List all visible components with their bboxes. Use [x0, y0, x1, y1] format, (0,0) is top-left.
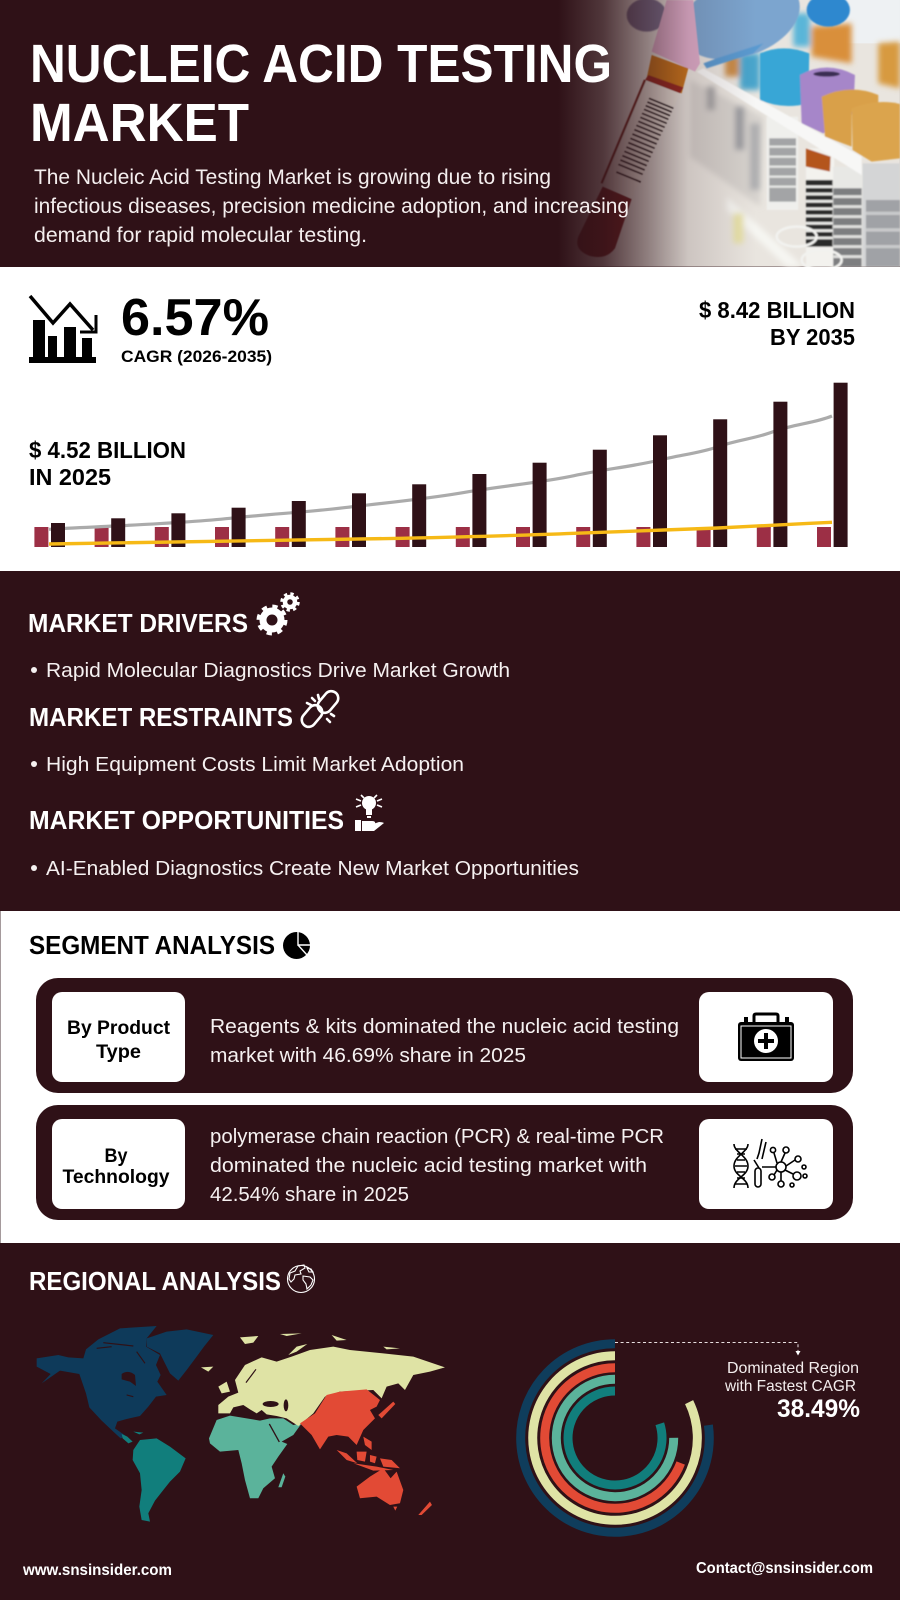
text: product type finding: market with 46.69% share in 2025: [210, 1044, 526, 1067]
label box: by product type: [52, 992, 185, 1082]
panel: header: [0, 0, 900, 270]
panel: segment analysis: [0, 911, 900, 1243]
title: NUCLEIC ACID TESTING: [30, 34, 612, 94]
text: product type finding: [210, 1015, 679, 1067]
text: technology finding: polymerase chain reaction (PCR) & real-time PCR: [210, 1125, 664, 1148]
base value: $ 4.52 BILLION: [29, 437, 186, 463]
text: driver item: Rapid Molecular Diagnostics Drive Market Growth: [46, 659, 510, 682]
label box: by technology: [52, 1119, 185, 1209]
CAGR value: 6.57%: [121, 289, 269, 347]
text: product type finding: Reagents & kits dominated the nucleic acid testing: [210, 1015, 679, 1038]
forecast value: [699, 297, 855, 350]
title: MARKET: [30, 93, 249, 153]
text: restraint item: High Equipment Costs Limit Market Adoption: [46, 753, 464, 776]
text: technology finding: 42.54% share in 2025: [210, 1183, 409, 1206]
label box: by technology: By: [104, 1145, 128, 1167]
bar chart: [34, 383, 848, 547]
base value: [29, 437, 186, 490]
callout: dominated region: with Fastest CAGR: [724, 1378, 856, 1395]
photo: lab test tubes in a rack: [568, 0, 900, 267]
region: south america: [122, 1432, 186, 1522]
text: technology finding: dominated the nucleic acid testing market with: [210, 1154, 647, 1177]
intro text: infectious diseases, precision medicine adoption, and increasing: [34, 195, 629, 218]
icon box: first aid kit: [699, 992, 833, 1082]
arrow: dashed leader to callout: [615, 1342, 800, 1356]
intro text: demand for rapid molecular testing.: [34, 224, 367, 247]
heading: regional analysis: REGIONAL ANALYSIS: [29, 1266, 281, 1296]
test tube in hand: [577, 0, 700, 257]
forecast value: $ 8.42 BILLION: [699, 297, 855, 323]
world map: [37, 1326, 445, 1522]
icon: light bulb over hand: [355, 795, 384, 831]
heading: segment analysis: SEGMENT ANALYSIS: [29, 930, 275, 960]
radial bar chart: [521, 1344, 709, 1532]
region: europe and north asia: [201, 1333, 445, 1426]
label box: by technology: Technology: [62, 1166, 170, 1188]
region: north america: [37, 1326, 213, 1438]
icon: globe: [288, 1265, 314, 1292]
forecast value: BY 2035: [770, 324, 855, 350]
heading: market drivers: MARKET DRIVERS: [28, 608, 248, 638]
footer: website: www.snsinsider.com: [22, 1562, 172, 1579]
icon: broken chain link: [299, 688, 341, 730]
icon: chart with trend arrow: [29, 296, 96, 363]
callout: dominated region: [724, 1360, 860, 1423]
label box: by product type: Type: [96, 1041, 141, 1063]
intro text: [34, 166, 629, 247]
base value: IN 2025: [29, 464, 111, 490]
text: technology finding: [210, 1125, 664, 1206]
panel: drivers, restraints, opportunities: [0, 571, 900, 911]
icon box: DNA and molecules: [699, 1119, 833, 1209]
text: opportunity item: AI-Enabled Diagnostics Create New Market Opportunities: [46, 857, 579, 880]
panel: regional analysis: [0, 1243, 900, 1600]
icon: pie chart: [283, 932, 311, 959]
region: asia pacific: [300, 1389, 432, 1515]
rack tubes and caps: [697, 48, 900, 270]
heading: market opportunities: MARKET OPPORTUNITIES: [29, 805, 344, 835]
panel: market size: [0, 267, 900, 571]
card: by technology: [36, 1105, 853, 1220]
icon: gears: [259, 594, 298, 633]
title: [30, 34, 612, 153]
footer: contact: Contact@snsinsider.com: [696, 1560, 873, 1577]
card: by product type: [36, 978, 853, 1093]
region: africa and middle east: [209, 1416, 302, 1498]
callout: dominated region: 38.49%: [777, 1395, 860, 1423]
icon: blue glove: [627, 0, 850, 74]
callout: dominated region: Dominated Region: [727, 1360, 859, 1377]
CAGR value: CAGR (2026-2035): [121, 347, 272, 366]
label box: by product type: By Product: [67, 1017, 170, 1039]
intro text: The Nucleic Acid Testing Market is growing due to rising: [34, 166, 551, 189]
heading: market restraints: MARKET RESTRAINTS: [29, 702, 293, 732]
